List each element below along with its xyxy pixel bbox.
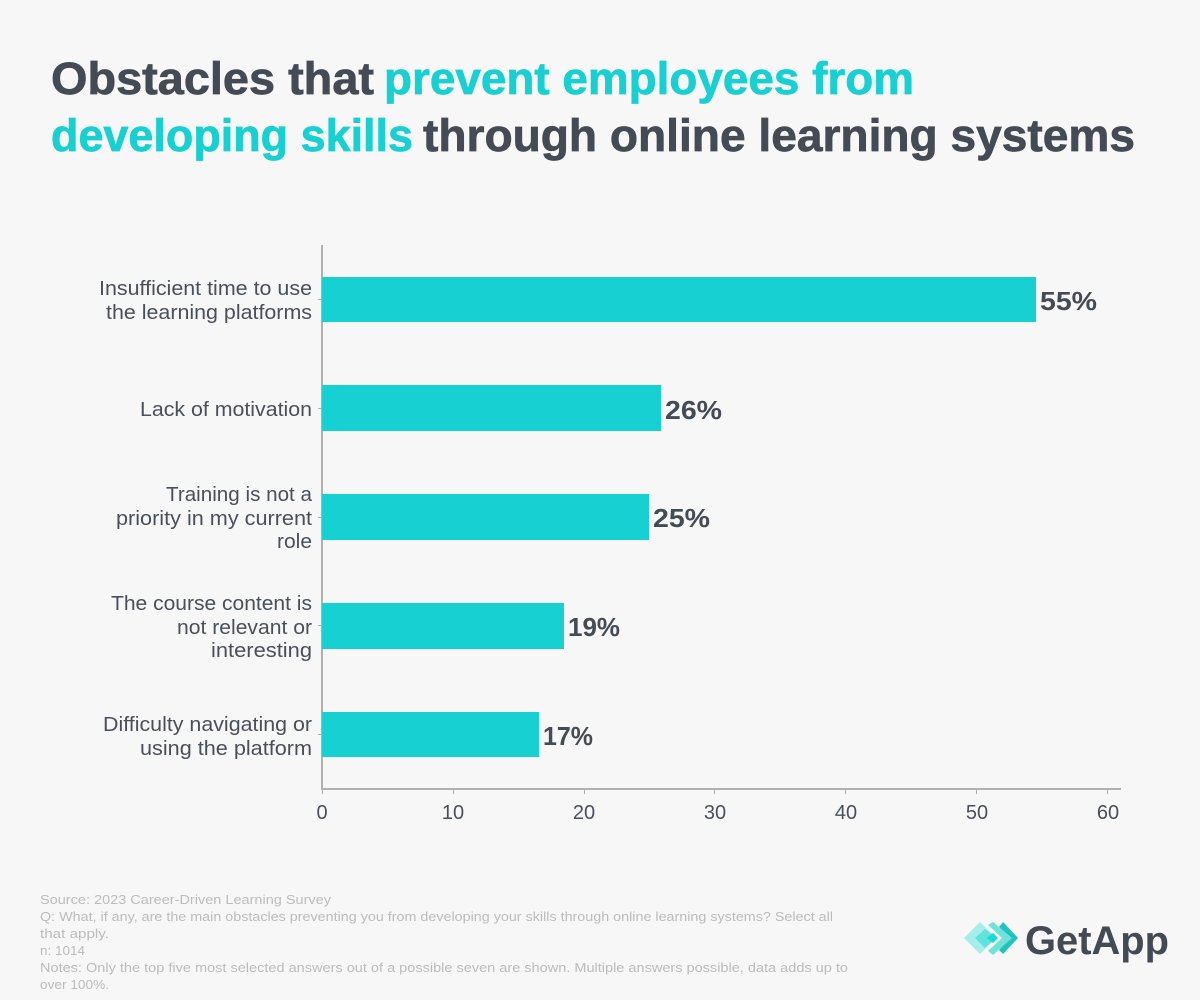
title: Obstacles that xyxy=(51,53,374,104)
row: training not a priority: priority in my current xyxy=(116,508,312,530)
title: through online learning systems xyxy=(423,110,1135,161)
x axis labels: 40 xyxy=(835,802,857,824)
row: insufficient time: 55% xyxy=(1040,286,1097,316)
row: difficulty navigating xyxy=(103,712,593,760)
row: training not a priority: role xyxy=(277,531,312,553)
row: course content: not relevant or xyxy=(177,617,312,639)
row: insufficient time: the learning platforms xyxy=(106,302,312,324)
logo: GetApp: GetApp xyxy=(1025,919,1169,963)
icon: layered diamonds xyxy=(964,922,1018,955)
bar chart xyxy=(99,245,1121,824)
title: developing skills xyxy=(51,110,413,161)
y axis xyxy=(318,245,323,789)
row: training not a priority xyxy=(116,484,710,553)
title xyxy=(51,53,1135,161)
x axis labels: 60 xyxy=(1097,802,1119,824)
row: lack of motivation: 26% xyxy=(665,395,722,425)
x axis labels: 20 xyxy=(573,802,595,824)
x axis labels: 10 xyxy=(442,802,464,824)
row: difficulty navigating: Difficulty navigating or xyxy=(103,714,312,736)
source notes: Source: 2023 Career-Driven Learning Survey xyxy=(40,892,332,907)
source notes: Notes: Only the top five most selected answers out of a possible seven are shown. Multiple answers possible, data adds up to xyxy=(40,960,848,975)
row: lack of motivation: Lack of motivation xyxy=(140,399,312,421)
row: course content: 19% xyxy=(568,612,620,642)
row: training not a priority: Training is not a xyxy=(166,484,313,506)
source notes: that apply. xyxy=(40,926,109,941)
row: lack of motivation xyxy=(140,385,722,431)
source notes: over 100%. xyxy=(40,977,109,992)
row: course content: interesting xyxy=(211,640,312,662)
source notes xyxy=(40,892,848,992)
row: course content: The course content is xyxy=(111,593,312,615)
x axis labels: 50 xyxy=(966,802,988,824)
x axis labels: 0 xyxy=(316,802,328,824)
source notes: Q: What, if any, are the main obstacles preventing you from developing your skills through online learning systems? Select all xyxy=(40,909,833,924)
title: prevent employees from xyxy=(384,53,914,104)
x axis labels xyxy=(316,802,1119,824)
row: training not a priority: 25% xyxy=(653,503,710,533)
x axis labels: 30 xyxy=(704,802,726,824)
row: difficulty navigating: 17% xyxy=(543,721,593,751)
source notes: n: 1014 xyxy=(40,943,85,958)
row: insufficient time xyxy=(99,277,1097,324)
x axis xyxy=(321,788,1121,794)
row: course content xyxy=(111,593,620,662)
row: difficulty navigating: using the platform xyxy=(140,738,312,760)
row: insufficient time: Insufficient time to use xyxy=(99,278,312,300)
